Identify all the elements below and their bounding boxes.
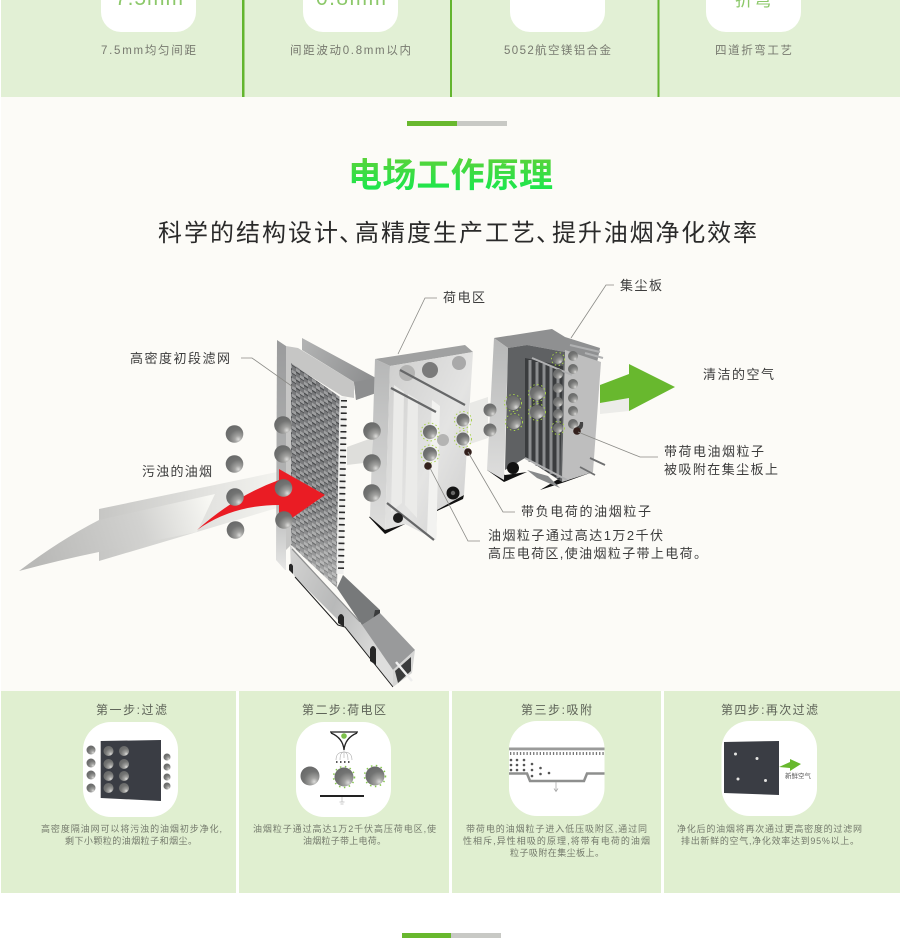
particles: at filter	[274, 416, 293, 529]
step 4 description	[677, 823, 862, 846]
step 1 description: 剩下小颗粒的油烟粒子和烟尘。	[65, 835, 197, 846]
subtitle: 、	[339, 220, 363, 247]
label: dust collector: 集尘板	[620, 278, 662, 293]
label: adsorbed particles: 带荷电油烟粒子	[664, 444, 764, 459]
step 1 heading: 第一步:过滤	[96, 703, 167, 717]
panel: step 1	[1, 691, 236, 893]
step 4 description: 排出新鲜的空气,净化效率达到95%以上。	[681, 835, 859, 846]
label: clean air: 清洁的空气	[703, 367, 774, 382]
label: adsorbed particles: 被吸附在集尘板上	[664, 462, 778, 477]
filter mesh assembly	[276, 340, 415, 687]
filter: back top bar	[302, 338, 376, 400]
charged particles	[421, 351, 581, 470]
step 3 description	[463, 823, 650, 858]
step 4 heading: 第四步:再次过滤	[721, 703, 818, 717]
top caption 2: 间距波动0.8mm以内	[290, 43, 411, 57]
step 2 description: 油烟粒子通过高达1万2千伏高压荷电区,使	[253, 823, 436, 834]
panel: step 3	[452, 691, 661, 893]
label: high voltage	[488, 528, 707, 561]
step 3 heading: 第三步:吸附	[521, 703, 592, 717]
top card 1	[101, 0, 196, 32]
step 2 description	[253, 823, 436, 846]
label: high voltage: 油烟粒子通过高达1万2千伏	[488, 528, 663, 543]
top caption 1: 7.5mm均匀间距	[101, 44, 196, 57]
dirty air flow	[19, 472, 277, 571]
connecting air band	[347, 397, 488, 465]
step 3 description: 带荷电的油烟粒子进入低压吸附区,通过同	[466, 823, 647, 834]
step 3 icon	[509, 721, 604, 816]
particles: before charging zone	[363, 422, 381, 502]
step 1 icon	[83, 722, 178, 817]
charging zone plate	[369, 345, 473, 540]
subtitle: 科学的结构设计	[158, 220, 338, 247]
label: dirty fumes: 污浊的油烟	[142, 464, 212, 479]
step 4 icon: 新鲜空气	[785, 771, 812, 780]
top card 3	[510, 0, 605, 32]
panel: step 2	[239, 691, 449, 893]
top card 2	[303, 0, 398, 32]
top card 4	[706, 0, 801, 32]
subtitle: 高精度生产工艺	[355, 220, 535, 247]
label: filter: 高密度初段滤网	[130, 351, 230, 366]
section background	[1, 97, 900, 691]
label: charging zone: 荷电区	[443, 290, 485, 305]
step 1 description: 高密度隔油网可以将污浊的油烟初步净化,	[41, 823, 222, 834]
particles: incoming column	[226, 425, 244, 539]
dust collector plate	[487, 329, 605, 490]
top caption 4: 四道折弯工艺	[715, 43, 792, 57]
step 2 description: 油烟粒子带上电荷。	[303, 835, 386, 846]
label: negative particles: 带负电荷的油烟粒子	[521, 504, 651, 519]
top caption 3: 5052航空镁铝合金	[504, 43, 612, 57]
subtitle	[158, 220, 757, 247]
step 3 description: 性相斥,异性相吸的原理,将带有电荷的油烟	[463, 835, 650, 846]
leader lines	[241, 285, 658, 541]
step 4 description: 净化后的油烟将再次通过更高密度的过滤网	[677, 823, 862, 834]
title: 电场工作原理	[348, 157, 553, 195]
top strip: feature panels	[1, 0, 900, 97]
panel: step 4	[664, 691, 900, 893]
clean air arrow	[600, 364, 675, 414]
bottom marker bar	[402, 933, 501, 938]
step 3 description: 粒子吸附在集尘板上。	[510, 847, 604, 858]
diagram: electric field working principle	[19, 278, 778, 687]
label: adsorbed particles	[664, 444, 778, 477]
subtitle: 、	[536, 220, 560, 247]
label: high voltage: 高压电荷区,使油烟粒子带上电荷。	[488, 546, 707, 561]
subtitle: 提升油烟净化效率	[552, 220, 757, 247]
filter bottom rail	[289, 545, 415, 687]
step 4 icon	[722, 721, 817, 816]
red arrow	[197, 469, 325, 530]
section marker bar	[407, 121, 507, 126]
step 1 description	[41, 823, 222, 846]
step 2 icon	[296, 722, 391, 817]
step 2 heading: 第二步:荷电区	[302, 703, 386, 717]
